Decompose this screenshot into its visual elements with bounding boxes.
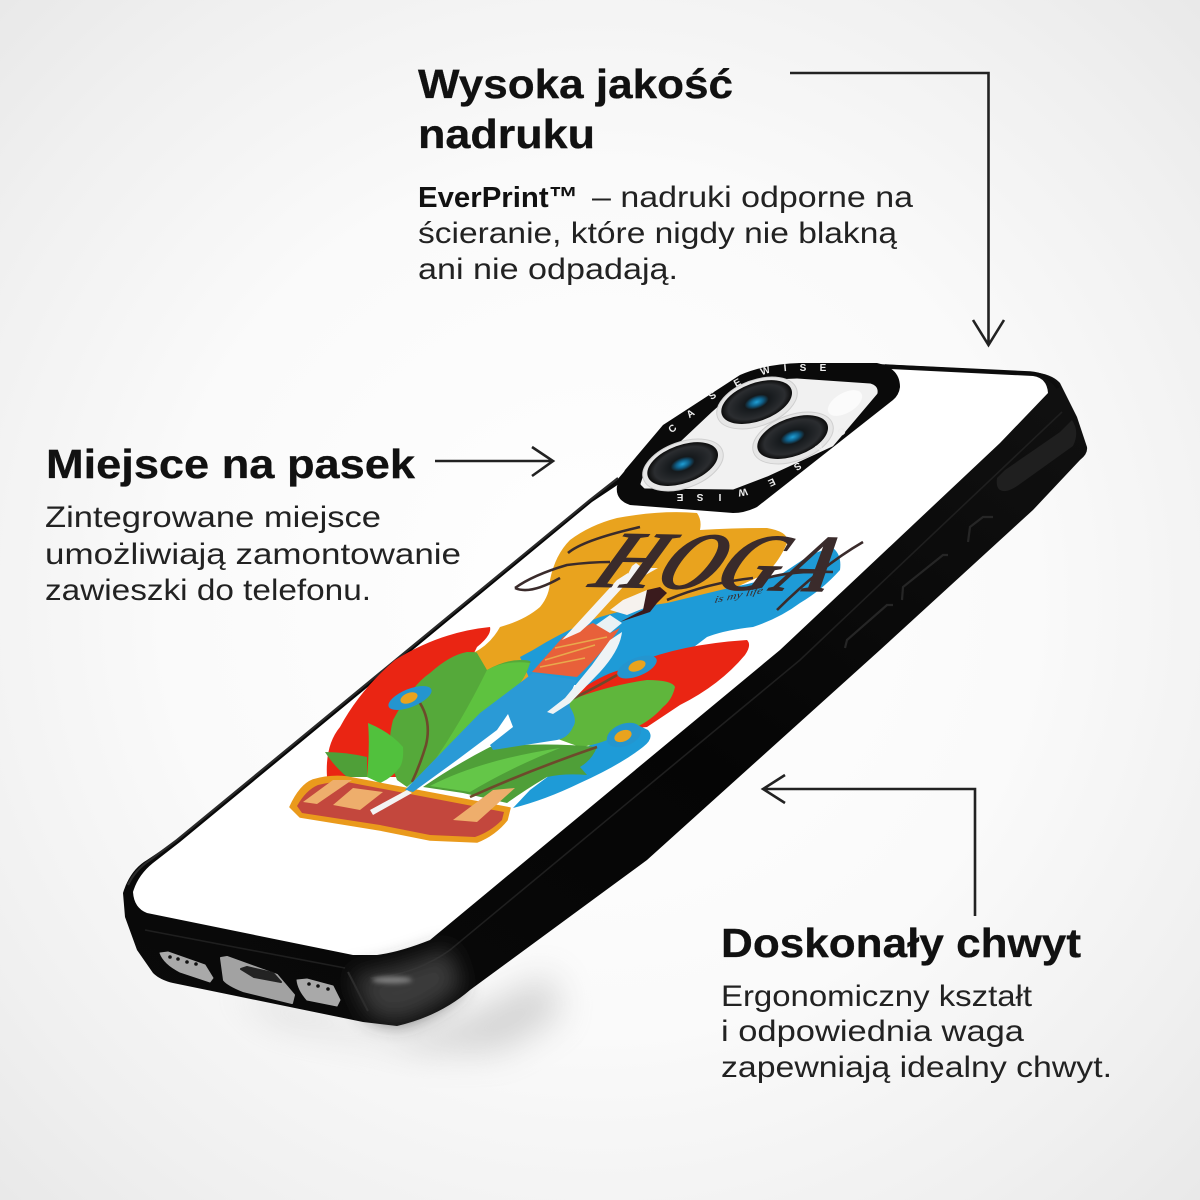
ring lettering bottom: W [737, 485, 748, 498]
ring lettering bottom: E [676, 491, 683, 502]
body text: Ergonomiczny kształt [721, 980, 1033, 1013]
thin rim along left edge [128, 478, 618, 885]
side bevel lines [145, 412, 1062, 978]
ring lettering top: S [707, 390, 719, 403]
ring lettering top: E [820, 363, 827, 374]
arrow to strap slot [435, 447, 553, 476]
bottom leaves [423, 744, 597, 803]
body text [418, 181, 913, 286]
top stripes [540, 637, 607, 667]
lower blue blob [513, 723, 651, 808]
foot [370, 790, 412, 815]
yoga mat [290, 776, 510, 842]
ring lettering top [667, 363, 827, 436]
big leaf cluster [390, 652, 531, 787]
heading: Wysoka jakość [418, 61, 733, 107]
blue leggings [405, 673, 577, 792]
rim along top edge [885, 366, 1058, 388]
body text: i odpowiednia waga [721, 1015, 1024, 1048]
face [610, 590, 647, 615]
ring lettering bottom: E [766, 475, 777, 488]
left leaf [325, 752, 367, 777]
right leaf [533, 680, 675, 747]
ring lettering bottom: C [835, 424, 847, 437]
strap slot [997, 420, 1076, 491]
body text: ścieranie, które nigdy nie blakną [418, 217, 897, 250]
body text: zapewniają idealny chwyt. [721, 1051, 1112, 1084]
ring lettering bottom: A [813, 440, 825, 453]
small leaf [367, 723, 403, 783]
callout: strap slot [45, 441, 553, 607]
ring lettering top: I [783, 363, 787, 374]
ring lettering bottom [676, 424, 847, 502]
bottom leaves highlight [430, 748, 560, 792]
bumper seam [348, 972, 368, 1011]
case outer body [123, 363, 1087, 1026]
stems [412, 675, 617, 797]
phone case [123, 363, 1087, 1026]
phone drop shadow [230, 975, 560, 1050]
heading: Miejsce na pasek [46, 441, 415, 487]
side buttons [845, 517, 993, 648]
yoga blocks [303, 780, 515, 822]
striped top [532, 623, 620, 677]
chest [593, 615, 622, 633]
camera island [617, 363, 900, 513]
blue blob [520, 548, 840, 690]
red blob left [327, 627, 490, 777]
tagline: is my life [713, 585, 765, 606]
bottom speaker right [297, 979, 340, 1006]
figure [370, 560, 667, 815]
callout: print quality [418, 61, 1004, 345]
arrow to print area [790, 73, 1004, 345]
callout: grip [721, 775, 1112, 1084]
orange blob [473, 512, 787, 690]
body text: – nadruki odporne na [592, 181, 913, 214]
lens top [710, 367, 804, 439]
flowers [385, 651, 660, 752]
heading: Doskonały chwyt [721, 920, 1081, 966]
body text: EverPrint™ [418, 182, 578, 214]
bottom corner highlight [352, 948, 462, 1022]
body text: ani nie odpadają. [418, 253, 678, 286]
ring lettering bottom: S [696, 491, 703, 502]
lens right [746, 402, 840, 474]
ring lettering top: A [685, 408, 697, 421]
yoga illustration [290, 512, 865, 842]
ring lettering bottom: I [718, 491, 721, 502]
body text: zawieszki do telefonu. [45, 574, 371, 607]
arrow to phone side [763, 775, 975, 916]
heading: nadruku [418, 111, 595, 157]
hair [620, 587, 667, 622]
ring lettering top: E [732, 377, 744, 390]
red blob right [570, 640, 749, 733]
body text [721, 980, 1112, 1084]
lettering swashes [515, 527, 863, 610]
heading [418, 61, 733, 157]
trailing leg [457, 730, 500, 760]
raised arm [562, 573, 632, 640]
ring lettering top: S [800, 363, 807, 374]
bottom speaker left [160, 952, 213, 982]
flash [824, 385, 866, 421]
body text: Zintegrowane miejsce [45, 501, 381, 534]
lens left [636, 429, 730, 501]
ring lettering bottom: S [791, 459, 803, 472]
white back panel [133, 368, 1048, 955]
charging port [221, 957, 294, 1003]
bright leaf highlight [420, 662, 530, 780]
camera glass window [642, 380, 876, 488]
ring lettering top: C [667, 423, 679, 436]
camera ring [617, 363, 900, 513]
body text [45, 501, 461, 607]
body text: umożliwiają zamontowanie [45, 538, 461, 571]
script lettering yoga: HOGA [575, 515, 865, 610]
lower arm [547, 632, 622, 714]
raised hand [628, 560, 658, 582]
ring lettering top: W [759, 365, 772, 378]
